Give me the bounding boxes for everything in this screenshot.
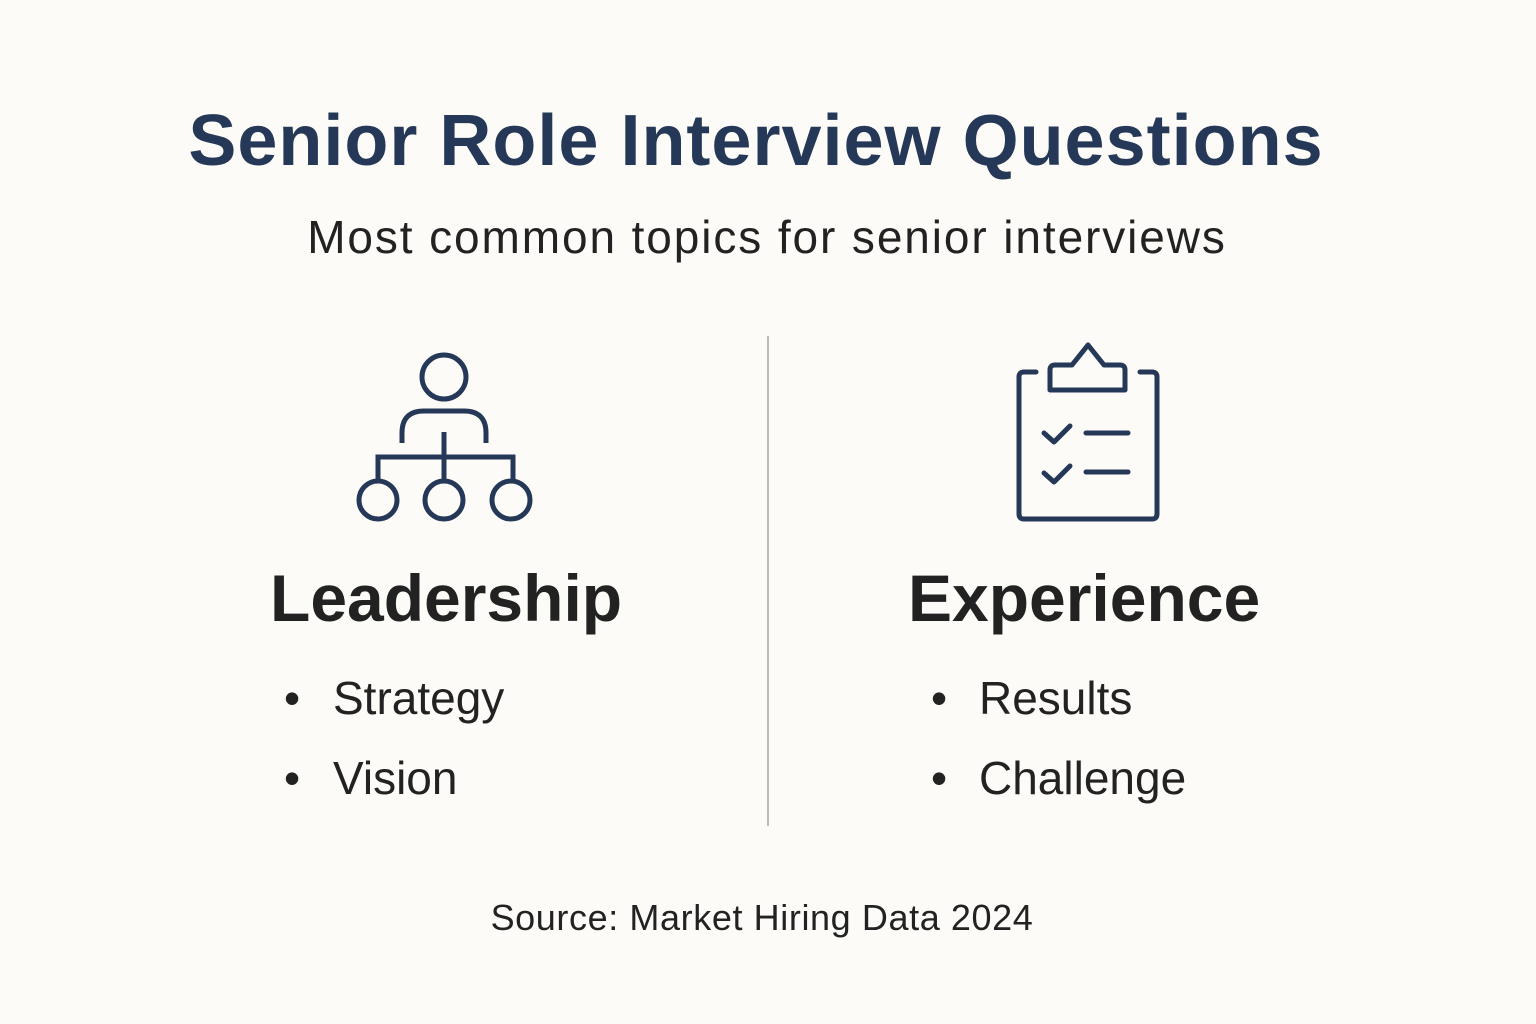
- divider: [767, 336, 769, 826]
- source: Source: Market Hiring Data 2024: [491, 897, 1033, 938]
- list: leadership: •: [284, 752, 300, 804]
- list: leadership: Vision: [333, 752, 457, 804]
- list: experience: •: [931, 752, 947, 804]
- panel: experience: [908, 561, 1260, 804]
- heading: experience: Experience: [908, 561, 1260, 635]
- list: leadership: •: [284, 672, 300, 724]
- panel: leadership: [270, 561, 622, 804]
- title: Senior Role Interview Questions: [188, 101, 1324, 181]
- list: experience: [931, 672, 1186, 804]
- list: experience: Results: [979, 672, 1132, 724]
- heading: leadership: Leadership: [270, 561, 622, 635]
- icon: org chart: [356, 352, 532, 522]
- list: experience: •: [931, 672, 947, 724]
- subtitle: Most common topics for senior interviews: [307, 211, 1227, 263]
- list: leadership: [284, 672, 504, 804]
- list: experience: Challenge: [979, 752, 1186, 804]
- icon: clipboard: [1016, 342, 1160, 522]
- list: leadership: Strategy: [333, 672, 504, 724]
